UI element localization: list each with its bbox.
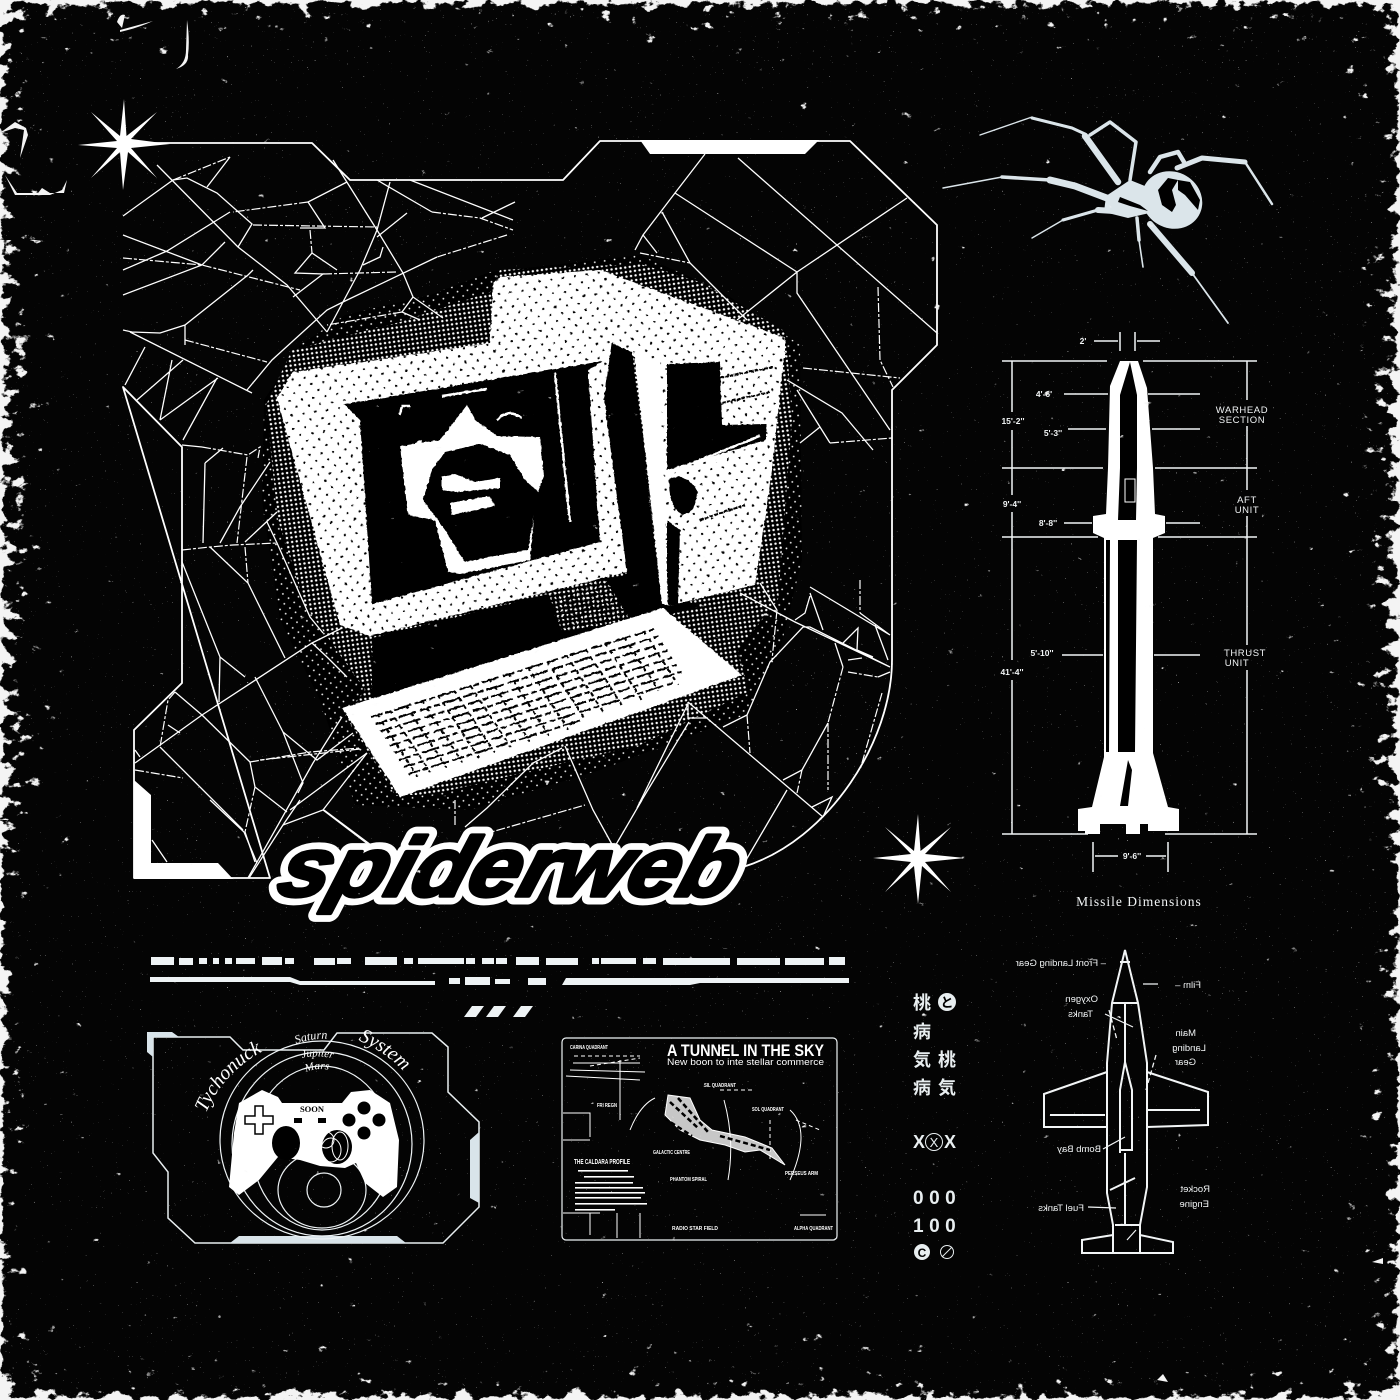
monitor bezel xyxy=(277,340,627,636)
dimension labels: UNIT xyxy=(1235,505,1259,516)
badge character xyxy=(938,993,956,1011)
chart labels: Mars xyxy=(304,1062,330,1072)
chart labels: System xyxy=(358,1030,409,1070)
spiderweb logo: spiderweb xyxy=(268,821,753,915)
gamepad xyxy=(229,1090,399,1197)
dimension labels: 8'-8'' xyxy=(1039,518,1057,528)
missile body xyxy=(1078,361,1179,834)
region labels: RADIO STAR FIELD xyxy=(672,1226,718,1232)
missile caption: Missile Dimensions xyxy=(1076,894,1202,909)
region labels: THE CALDARA PROFILE xyxy=(574,1159,630,1166)
region labels: PHANTOM SPIRAL xyxy=(670,1177,707,1183)
dimension labels: 4'-6' xyxy=(1036,389,1052,399)
japanese text column: X xyxy=(913,1132,925,1152)
dimension labels: WARHEAD xyxy=(1216,405,1268,416)
gamepad label: SOON xyxy=(300,1104,325,1114)
missile inner dark bands xyxy=(1106,362,1137,806)
dimension labels: 9'-6'' xyxy=(1123,851,1141,861)
badge character: と xyxy=(940,995,954,1010)
panel paragraph xyxy=(575,1170,647,1211)
chart labels: Tychonuck xyxy=(194,1042,262,1112)
dimension labels: AFT xyxy=(1237,495,1257,506)
chart labels: Jupiter xyxy=(302,1049,334,1059)
japanese text column: 桃 xyxy=(938,1050,956,1070)
redacted heading bars xyxy=(150,957,849,985)
tower drive streaks xyxy=(700,367,773,520)
jet mirrored labels: Main xyxy=(1175,1028,1196,1039)
galaxy burst xyxy=(665,1095,785,1165)
spiderweb logo: spiderweb xyxy=(268,821,753,915)
region labels: CARINA QUADRANT xyxy=(570,1045,608,1051)
spider markings xyxy=(1118,178,1200,212)
dimension labels: THRUST xyxy=(1224,648,1266,659)
monitor underside xyxy=(372,574,700,700)
jet mirrored labels: Tanks xyxy=(1068,1009,1093,1020)
copyright glyphs xyxy=(914,1244,954,1260)
star map lines xyxy=(563,1056,826,1238)
face glint lines xyxy=(400,373,570,522)
dimension labels: 41'-4'' xyxy=(1000,667,1024,677)
circled x xyxy=(926,1134,942,1150)
dimension labels: 9'-4'' xyxy=(1003,499,1021,509)
monitor top block xyxy=(490,270,785,365)
jet mirrored labels: Fuel Tanks xyxy=(1038,1203,1084,1214)
panel accents xyxy=(147,1032,479,1243)
halftone patch xyxy=(548,578,630,632)
spider web lines xyxy=(123,154,937,878)
japanese text column xyxy=(913,993,961,1260)
frame corner bracket xyxy=(134,780,233,879)
stick wire circles xyxy=(318,1132,348,1162)
orbits xyxy=(220,1041,424,1239)
jet schematic xyxy=(1016,950,1210,1253)
japanese text column: 病 xyxy=(913,1078,931,1098)
chart labels: Saturn xyxy=(295,1033,327,1044)
jet mirrored labels: Rocket xyxy=(1180,1184,1210,1195)
tower front xyxy=(658,345,785,606)
monitor screen xyxy=(344,361,603,604)
region labels: SIL QUADRANT xyxy=(704,1083,736,1089)
missile dimensions diagram xyxy=(1000,332,1268,909)
jet mirrored labels: Gear xyxy=(1175,1057,1196,1068)
jet mirrored labels: Engine xyxy=(1179,1199,1209,1210)
missile port xyxy=(1125,479,1135,502)
japanese text column: 桃 xyxy=(913,993,931,1013)
slashes xyxy=(464,1006,533,1017)
japanese text column: 病 xyxy=(913,1022,931,1042)
spider cephalothorax xyxy=(1104,180,1154,218)
region labels: PERSEUS ARM xyxy=(785,1171,818,1177)
circled x: X xyxy=(930,1135,939,1150)
dimension lines xyxy=(1002,332,1257,872)
spider xyxy=(943,117,1272,323)
white side strip xyxy=(634,352,668,606)
jet mirrored labels: Landing xyxy=(1172,1043,1206,1054)
gamepad buttons and sticks xyxy=(245,1102,386,1164)
keyboard keys xyxy=(371,628,694,779)
frame with web and computer xyxy=(123,140,937,879)
region labels xyxy=(570,1045,833,1232)
burst dark detail xyxy=(664,1098,770,1150)
jet mirrored labels: Oxygen xyxy=(1065,994,1098,1005)
region labels: GALACTIC CENTRE xyxy=(653,1150,690,1156)
jet mirrored labels: – Front Landing Gear xyxy=(1016,958,1106,969)
keyboard xyxy=(342,608,742,797)
inner dense halftone xyxy=(266,264,792,795)
panel title: A TUNNEL IN THE SKY xyxy=(667,1042,824,1060)
face teeth xyxy=(442,474,500,515)
dimension labels: 5'-3'' xyxy=(1044,428,1062,438)
japanese text column: 000 xyxy=(913,1188,961,1209)
spider legs xyxy=(943,117,1272,323)
dimension labels: UNIT xyxy=(1225,658,1249,669)
face highlight xyxy=(400,405,544,574)
computer illustration xyxy=(277,270,785,797)
controller panel xyxy=(147,1030,480,1244)
tunnel in the sky panel xyxy=(562,1038,837,1240)
dimension labels: 2' xyxy=(1080,336,1086,346)
region labels: ALPHA QUADRANT xyxy=(794,1226,833,1232)
star top left xyxy=(78,99,170,190)
region labels: SOL QUADRANT xyxy=(752,1107,784,1113)
japanese text column: 気 xyxy=(938,1077,956,1098)
jet mirrored labels xyxy=(1016,958,1210,1214)
jet outline xyxy=(1044,950,1208,1253)
black side strip xyxy=(604,342,662,604)
spider abdomen xyxy=(1131,160,1213,240)
halftone surround xyxy=(262,255,802,810)
panel outline xyxy=(153,1033,479,1243)
dimension labels: 5'-10'' xyxy=(1030,648,1054,658)
jet mirrored labels: Film – xyxy=(1174,980,1201,991)
frame top highlight xyxy=(640,140,819,154)
panel subtitle: New boon to inte stellar commerce xyxy=(667,1057,824,1068)
chart labels xyxy=(194,1030,409,1112)
star bottom right xyxy=(873,814,965,904)
japanese text column: X xyxy=(944,1132,956,1152)
dimension labels xyxy=(1000,336,1268,861)
japanese text column: 気 xyxy=(913,1049,931,1070)
dimension labels: 15'-2'' xyxy=(1001,416,1025,426)
japanese text column: 100 xyxy=(913,1216,961,1237)
panel border xyxy=(562,1038,837,1240)
dimension labels: SECTION xyxy=(1219,415,1265,426)
copyright glyphs: C xyxy=(918,1246,927,1260)
frame outline xyxy=(123,141,937,878)
outer sparse halftone xyxy=(262,255,802,810)
tower dark areas xyxy=(667,362,766,606)
region labels: FRI REGN xyxy=(597,1103,617,1109)
jet mirrored labels: Bomb Bay xyxy=(1057,1144,1101,1155)
face mouth and beard xyxy=(423,444,538,562)
